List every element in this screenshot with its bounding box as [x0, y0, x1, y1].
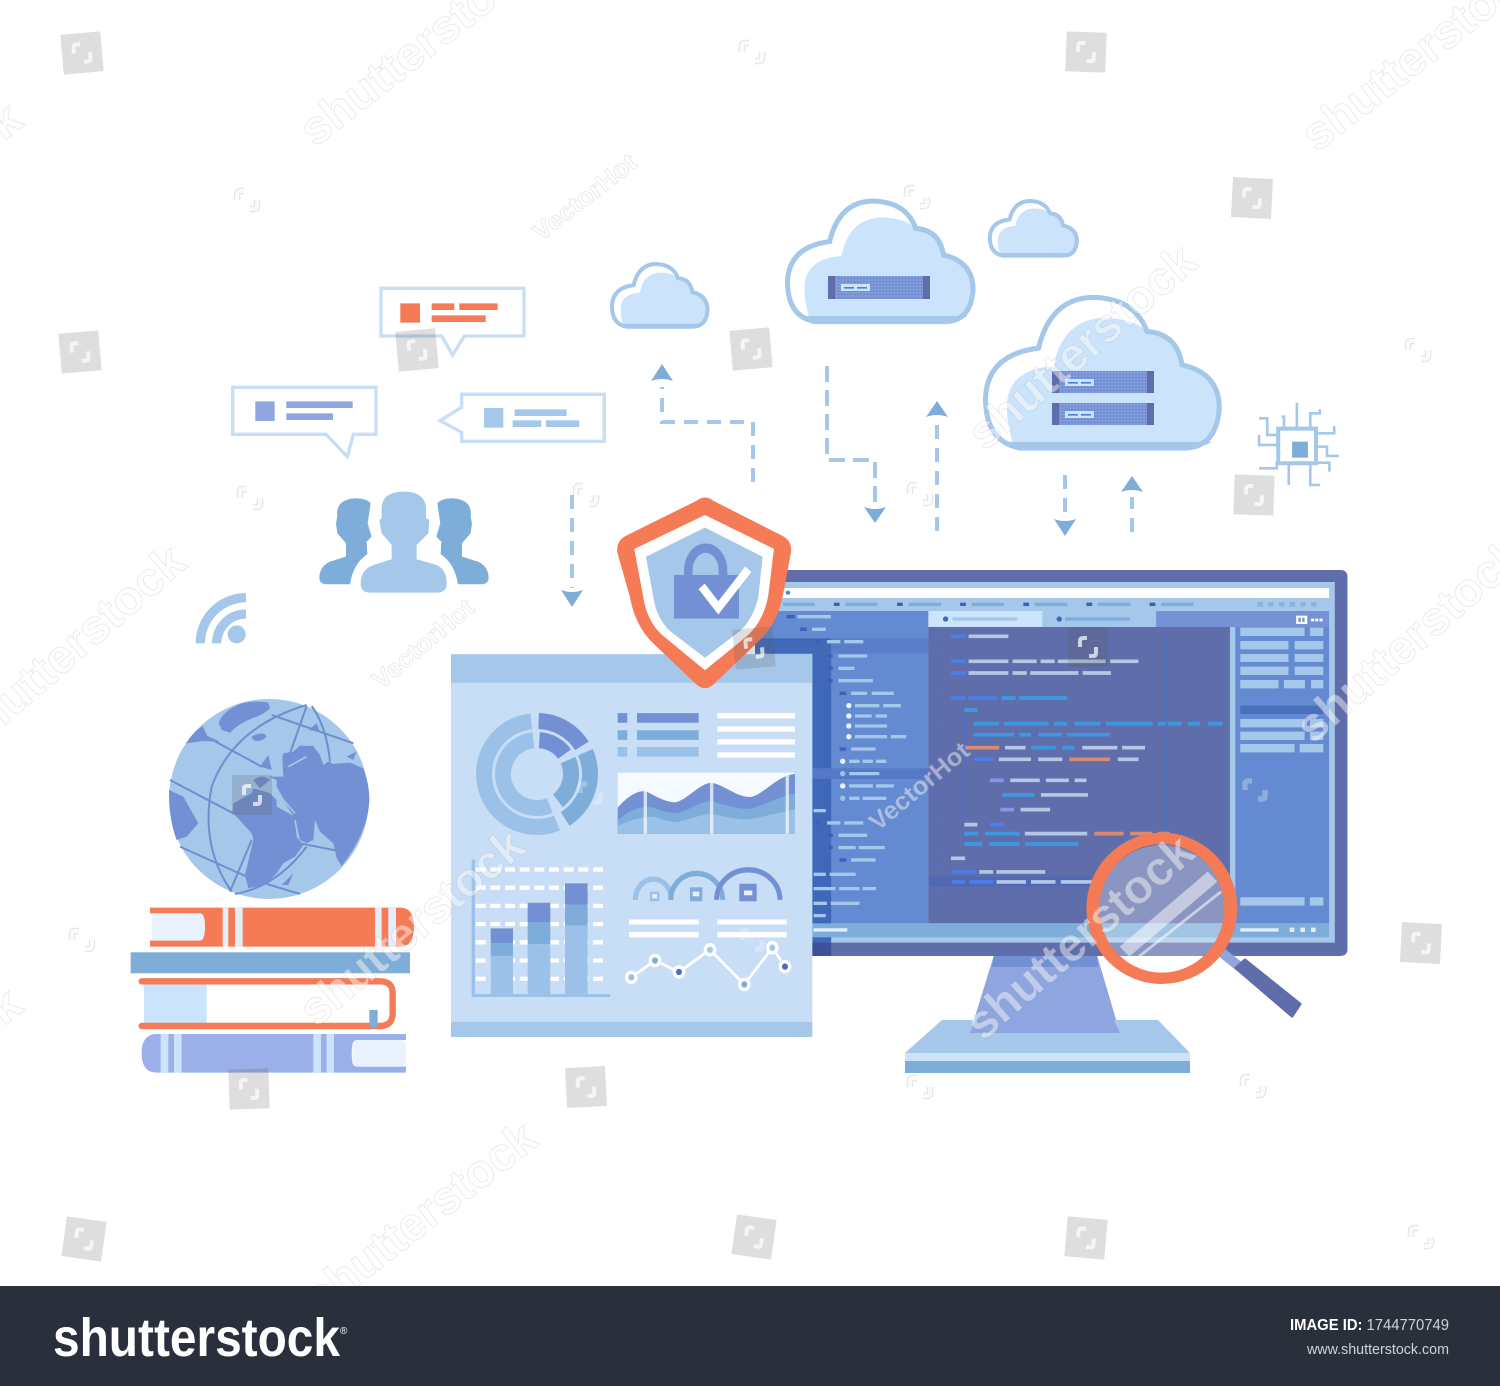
speech bubble: orange — [381, 288, 524, 355]
shield with padlock — [617, 497, 791, 688]
speech bubble: light blue — [440, 394, 604, 441]
panel: status bar — [812, 923, 1329, 937]
watermark: faint diagonal text: VectorHot — [527, 148, 643, 247]
padlock — [674, 548, 739, 619]
watermark: faint diagonal text: shutterstock — [955, 823, 1205, 1050]
arrow: elbow up to small cloud — [651, 364, 753, 482]
cloud: small right — [990, 201, 1077, 256]
icon: globe — [169, 699, 369, 899]
text lines — [717, 713, 795, 758]
speech bubble: periwinkle — [233, 387, 376, 457]
gauge captions — [629, 919, 787, 937]
registered mark: ® — [340, 1326, 348, 1337]
gauges — [635, 870, 780, 901]
arrow: up to large cloud — [1121, 476, 1143, 532]
magnifying glass — [1093, 838, 1300, 1016]
dashboard window — [451, 654, 812, 1037]
panel: tabs — [928, 611, 1329, 627]
cloud: large with two servers — [985, 297, 1219, 448]
watermark: faint diagonal text: VectorHot — [367, 593, 480, 695]
icon: group of people — [319, 492, 489, 593]
arrow: elbow down from top cloud — [827, 366, 886, 523]
icon: server rack lower in large cloud — [1052, 403, 1154, 425]
cloud: top with server — [787, 201, 973, 322]
arrow: down from large cloud — [1054, 475, 1076, 536]
icon: server rack upper in large cloud — [1052, 371, 1154, 393]
icon: microchip — [1259, 403, 1339, 485]
monitor frame and screen — [755, 570, 1347, 956]
watermark: faint diagonal text: shutterstock — [288, 817, 534, 1036]
website: www.shutterstock.com — [1306, 1341, 1449, 1358]
arrow: down to dashboard — [561, 495, 583, 607]
check mark — [702, 569, 748, 608]
monitor stand — [905, 955, 1190, 1073]
arrow: up to top cloud — [926, 401, 948, 537]
footer logo: shutterstock — [53, 1308, 341, 1368]
panel: right properties — [1230, 627, 1329, 923]
magnifier handle — [1221, 952, 1300, 1016]
book stack — [131, 908, 414, 1073]
footer bar — [0, 1286, 1500, 1386]
line chart — [627, 943, 790, 989]
monitor — [755, 570, 1347, 1073]
watermark: faint diagonal text: shutterstock — [295, 1109, 547, 1323]
watermark: faint diagonal text: VectorHot — [864, 736, 976, 837]
speech bubbles — [233, 288, 604, 457]
legend list — [618, 713, 699, 757]
watermark: faint diagonal text: shutterstock — [957, 233, 1207, 460]
book: orange top — [150, 908, 414, 947]
magnifier lens — [1093, 838, 1231, 978]
icon: server rack in top cloud — [828, 276, 930, 299]
watermark: small outlined logo marks — [72, 43, 1431, 1246]
area chart — [618, 773, 795, 834]
panel: file tree — [755, 611, 928, 956]
book: periwinkle bottom — [142, 1034, 406, 1073]
panel: code editor — [928, 627, 1230, 923]
book: orange open cover — [142, 981, 393, 1028]
donut chart — [467, 704, 607, 844]
image id: IMAGE ID: 1744770749 — [1290, 1317, 1449, 1334]
icon: wifi signal — [200, 598, 246, 643]
bar chart — [472, 859, 610, 997]
cloud: small left — [612, 264, 708, 327]
book: blue flat — [131, 952, 410, 973]
